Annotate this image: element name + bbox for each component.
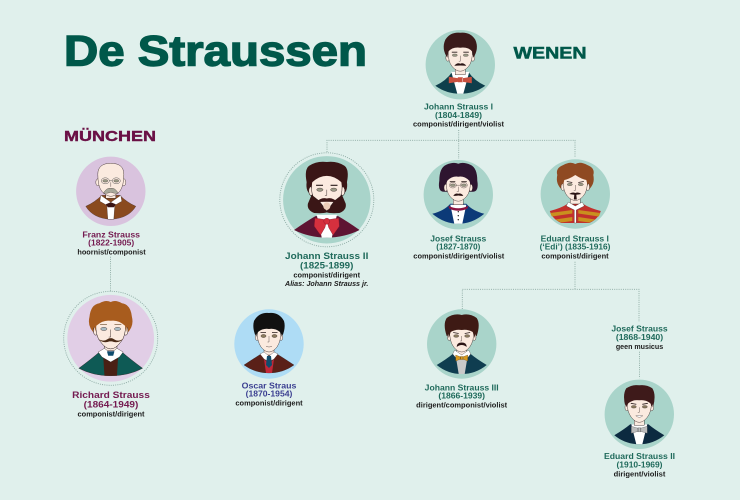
role: componist/dirigent (78, 412, 145, 419)
alias: Alias: Johann Strauss jr. (284, 281, 368, 288)
connector line: München family (110, 257, 112, 292)
name: Johann Strauss III (425, 383, 499, 392)
name: Josef Strauss (611, 325, 668, 334)
years: (1870-1954) (246, 390, 293, 399)
name: Johann Strauss II (285, 251, 369, 262)
years: (1864-1949) (84, 400, 138, 411)
role: componist/dirigent/violist (413, 253, 505, 260)
name: Oscar Straus (242, 381, 297, 390)
person: Johann Strauss II (280, 153, 374, 288)
years: (1825-1899) (300, 261, 353, 272)
portrait (76, 157, 146, 226)
person: Johann Strauss I (413, 30, 505, 129)
role: dirigent/violist (614, 471, 666, 478)
name: Franz Strauss (82, 230, 141, 240)
portrait (426, 30, 495, 99)
person: Josef Strauss (1868-1940) (611, 325, 668, 351)
role: hoornist/componist (77, 250, 146, 256)
person: Eduard Strauss II (604, 380, 675, 478)
years: (1910-1969) (616, 461, 663, 470)
role: componist/dirigent (235, 400, 303, 407)
name: Johann Strauss I (424, 102, 493, 112)
years: (1804-1849) (435, 111, 482, 120)
dotted ring (280, 153, 374, 247)
heading: München: MÜNCHEN (64, 128, 156, 145)
years: (1866-1939) (438, 392, 485, 401)
person: Franz Strauss (76, 157, 146, 256)
portrait (424, 160, 493, 229)
years: (‘Edi’) (1835-1916) (540, 243, 611, 252)
dotted ring (64, 291, 158, 385)
name: Richard Strauss (72, 390, 150, 401)
role: componist/dirigent/violist (413, 122, 505, 129)
connector lines: Wenen family tree (327, 130, 640, 378)
years: (1822-1905) (88, 239, 134, 248)
portrait (234, 309, 304, 379)
portrait (541, 159, 610, 229)
role: geen musicus (616, 344, 663, 351)
person: Josef Strauss (413, 160, 505, 260)
portrait (67, 295, 154, 382)
portrait (283, 156, 371, 244)
name: Josef Strauss (430, 234, 487, 243)
role: dirigent/componist/violist (416, 402, 508, 409)
title: De Straussen (64, 28, 367, 76)
portrait (605, 380, 674, 449)
role: componist/dirigent (293, 273, 361, 280)
years: (1827-1870) (436, 243, 481, 252)
portrait (427, 309, 496, 379)
person: Eduard Strauss I (540, 159, 611, 260)
heading: Wenen: WENEN (514, 44, 586, 62)
person: Johann Strauss III (416, 309, 508, 409)
person: Richard Strauss (64, 291, 158, 419)
role: componist/dirigent (541, 253, 609, 260)
name: Eduard Strauss I (541, 234, 609, 243)
person: Oscar Straus (234, 309, 304, 407)
name: Eduard Strauss II (604, 452, 675, 461)
years: (1868-1940) (616, 333, 663, 342)
